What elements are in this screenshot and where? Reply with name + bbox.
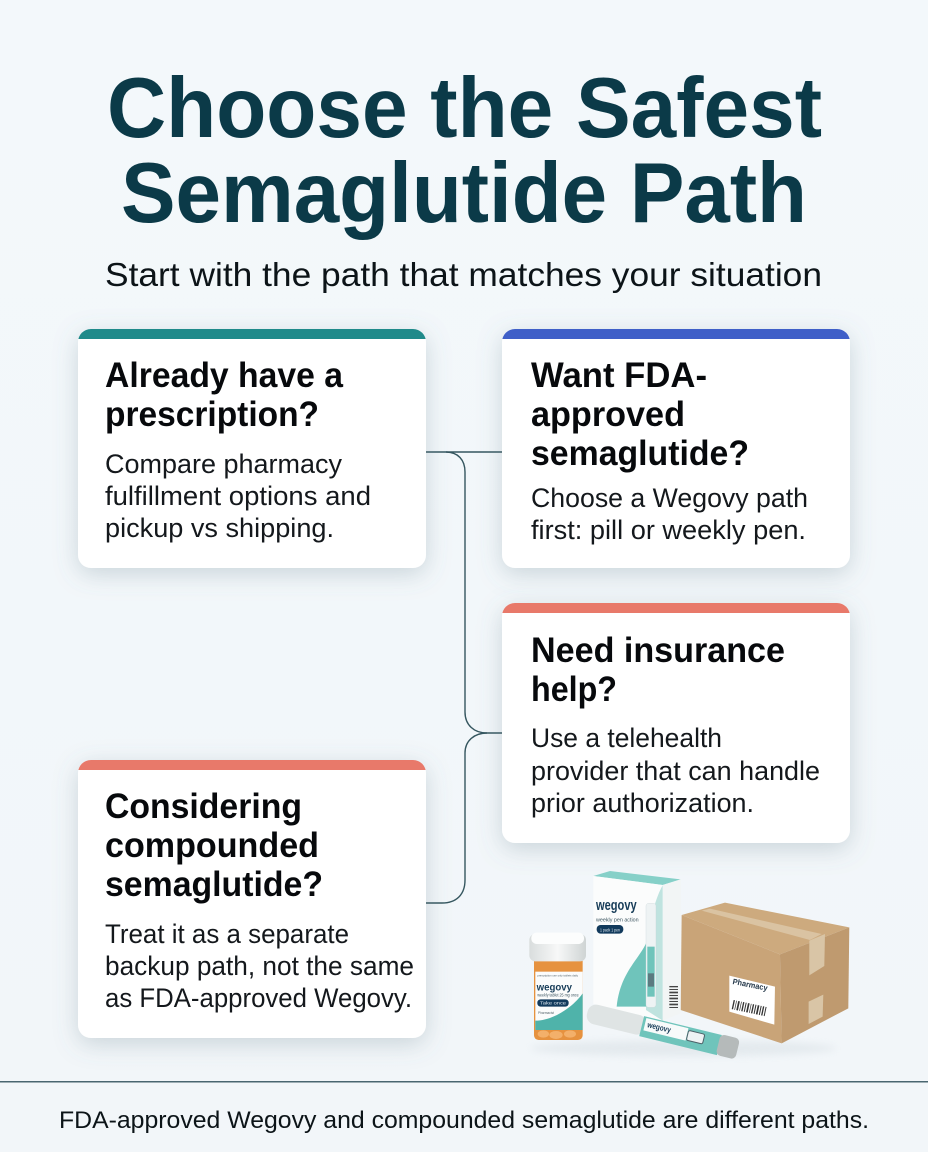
heading: Want FDA- [531, 356, 707, 395]
icon: injection pen [585, 1002, 740, 1060]
icon: shipping box [681, 903, 849, 1043]
heading: Considering [105, 787, 302, 826]
icon: pill bottle [529, 933, 586, 1040]
heading: help? [531, 670, 617, 709]
heading [105, 356, 344, 434]
heading: semaglutide? [105, 865, 323, 904]
heading: prescription? [105, 395, 319, 434]
icon: pill bottle: wegovy [536, 983, 572, 994]
heading: Need insurance [531, 631, 785, 670]
heading: Already have a [105, 356, 344, 395]
icon: shipping box: Pharmacy [732, 977, 769, 993]
body text: Treat it as a separate [105, 919, 349, 949]
icon: pill bottle: prescription use only tablets daily [537, 974, 578, 978]
title: Semaglutide Path [121, 146, 807, 241]
icon: wegovy carton [593, 871, 681, 1021]
body text [531, 723, 820, 818]
card: already have a prescription [78, 329, 426, 568]
card: want FDA-approved semaglutide [502, 329, 850, 568]
body text: first: pill or weekly pen. [531, 515, 806, 545]
body text: as FDA-approved Wegovy. [105, 983, 412, 1013]
card: need insurance help [502, 603, 850, 843]
heading [531, 356, 749, 473]
icon: wegovy carton: wegovy [595, 898, 637, 914]
icon: wegovy carton: 1 pack 1 pen [600, 927, 620, 932]
body text [531, 483, 808, 545]
body text: provider that can handle [531, 756, 820, 786]
heading: compounded [105, 826, 319, 865]
heading [531, 631, 785, 709]
icon: pill bottle: weekly tablet 25 mg once [537, 993, 579, 998]
heading [105, 787, 323, 904]
body text [105, 449, 371, 543]
body text: Use a telehealth [531, 723, 722, 753]
body text: prior authorization. [531, 788, 754, 818]
icon: injection pen: wegovy [646, 1020, 672, 1035]
body text: Compare pharmacy [105, 449, 342, 479]
body text: pickup vs shipping. [105, 513, 334, 543]
product illustration [529, 871, 849, 1060]
icon: pill bottle: Take once [540, 1001, 567, 1006]
body text: backup path, not the same [105, 951, 414, 981]
subtitle: Start with the path that matches your situation [105, 256, 822, 293]
connector lines [426, 452, 502, 903]
heading: approved [531, 395, 685, 434]
title: Choose the Safest [107, 61, 822, 156]
title [107, 61, 822, 241]
icon: wegovy carton: weekly pen action [595, 918, 639, 924]
icon: pill bottle: Pharmacist [538, 1010, 555, 1015]
footer note: FDA-approved Wegovy and compounded semaglutide are different paths. [59, 1107, 869, 1134]
heading: semaglutide? [531, 434, 749, 473]
footer divider [0, 1081, 928, 1082]
body text [105, 919, 414, 1013]
card: considering compounded semaglutide [78, 760, 426, 1038]
body text: fulfillment options and [105, 481, 371, 511]
body text: Choose a Wegovy path [531, 483, 808, 513]
